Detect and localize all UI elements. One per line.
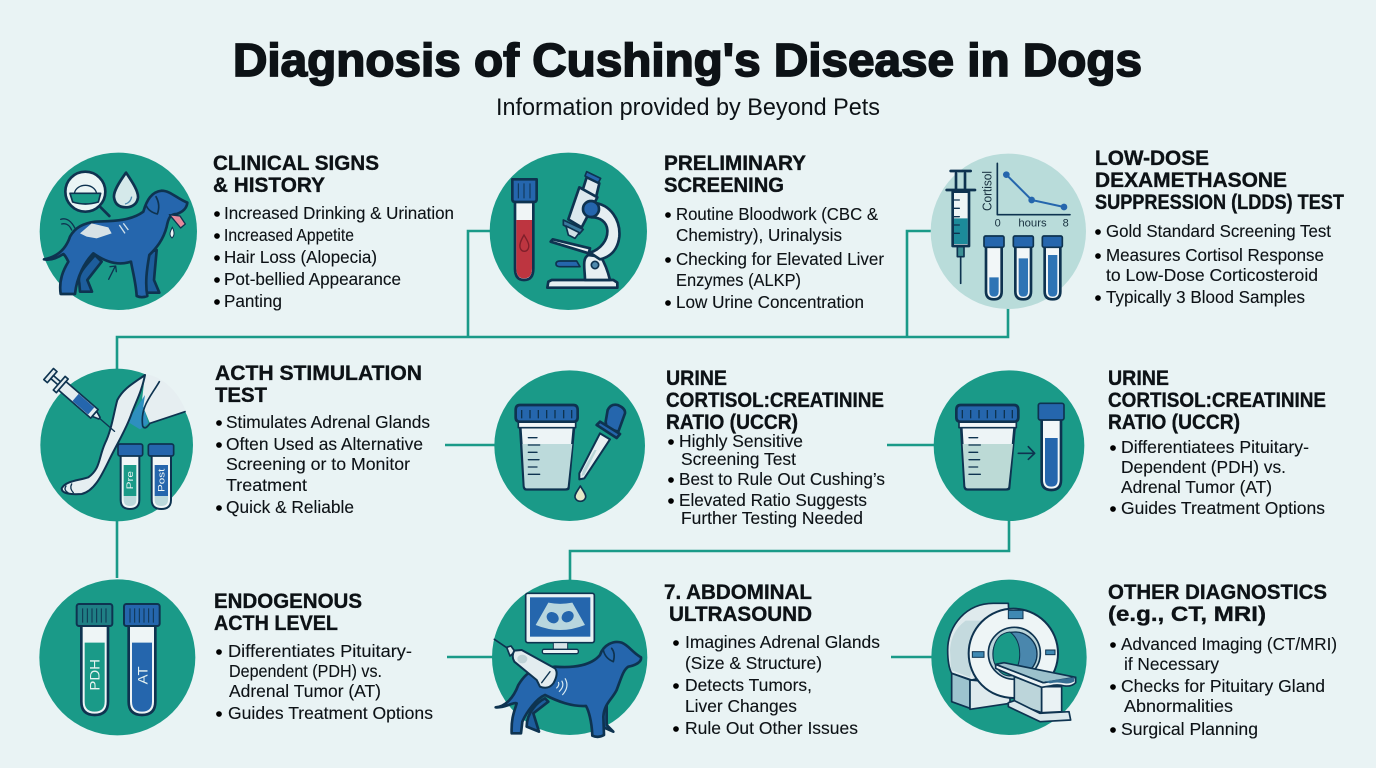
icon: injection into leg with pre and post tubes — [40, 367, 193, 521]
bullet list: Imagines Adrenal Glands — [685, 632, 880, 652]
heading: LOW-DOSE — [1095, 147, 1209, 170]
bullet list: Often Used as Alternative — [226, 434, 423, 454]
bullet list: Hair Loss (Alopecia) — [224, 247, 377, 267]
bullet list: Quick & Reliable — [226, 497, 354, 517]
bullet list — [214, 203, 454, 311]
heading — [664, 152, 806, 197]
bullet list — [665, 204, 884, 312]
icon: blood tube and microscope — [490, 153, 647, 310]
heading: PRELIMINARY — [664, 152, 806, 175]
icon: urine cup and dropper — [494, 370, 645, 521]
icon: syringe, cortisol chart and blood samples: hours — [1018, 218, 1047, 230]
heading: ENDOGENOUS — [214, 590, 362, 613]
panel: urine cortisol creatinine ratio, screening — [494, 367, 885, 528]
panel: urine cortisol creatinine ratio, differentiation — [934, 367, 1326, 521]
icon: syringe, cortisol chart and blood samples: Cortisol — [980, 171, 994, 211]
bullet list: Adrenal Tumor (AT) — [1121, 477, 1272, 497]
subtitle: Information provided by Beyond Pets — [496, 94, 880, 121]
icon: injection into leg with pre and post tubes: Post — [157, 468, 167, 492]
icon: MRI scanner — [931, 580, 1087, 735]
heading: & HISTORY — [213, 174, 325, 197]
bullet list: Guides Treatment Options — [1121, 498, 1325, 518]
heading: URINE — [1108, 367, 1169, 390]
bullet list: Dependent (PDH) vs. — [229, 661, 382, 681]
bullet list: Routine Bloodwork (CBC & — [676, 204, 878, 224]
bullet list — [216, 412, 430, 517]
icon: urine cup, arrow and sample tube — [934, 370, 1084, 521]
panel: other diagnostics — [931, 580, 1337, 739]
heading: (e.g., CT, MRI) — [1108, 603, 1266, 626]
heading: RATIO (UCCR) — [666, 411, 798, 434]
panel: low-dose dexamethasone suppression test — [931, 147, 1344, 309]
heading: ACTH STIMULATION — [215, 362, 422, 385]
bullet list: Measures Cortisol Response — [1106, 245, 1324, 265]
bullet list: Enzymes (ALKP) — [676, 270, 801, 290]
bullet list — [668, 431, 885, 528]
icon: ultrasound monitor, probe and dog — [492, 580, 647, 737]
bullet list: (Size & Structure) — [685, 653, 822, 673]
bullet list: Stimulates Adrenal Glands — [226, 412, 430, 432]
bullet list: Checks for Pituitary Gland — [1121, 676, 1325, 696]
bullet list — [673, 632, 880, 738]
heading — [666, 367, 884, 434]
bullet list: Low Urine Concentration — [676, 292, 864, 312]
icon: PDH and AT tubes — [39, 579, 195, 735]
heading: CLINICAL SIGNS — [213, 152, 379, 175]
bullet list: Panting — [224, 291, 282, 311]
heading: CORTISOL:CREATININE — [666, 389, 884, 412]
title: Diagnosis of Cushing's Disease in Dogs — [233, 34, 1142, 86]
icon: syringe, cortisol chart and blood samples: 0 — [995, 218, 1001, 230]
bullet list: if Necessary — [1124, 654, 1219, 674]
heading: CORTISOL:CREATININE — [1108, 389, 1326, 412]
bullet list: Advanced Imaging (CT/MRI) — [1121, 634, 1337, 654]
bullet list: Increased Drinking & Urination — [224, 203, 454, 223]
icon: syringe, cortisol chart and blood samples: 8 — [1063, 218, 1069, 230]
bullet list: Rule Out Other Issues — [685, 718, 858, 738]
bullet list: Surgical Planning — [1121, 719, 1258, 739]
bullet list: Screening or to Monitor — [226, 454, 410, 474]
heading — [215, 362, 422, 407]
bullet list: Adrenal Tumor (AT) — [229, 681, 381, 701]
panel: endogenous acth level — [39, 579, 433, 735]
bullet list: Liver Changes — [685, 696, 797, 716]
icon: PDH and AT tubes: AT — [134, 666, 150, 684]
heading: URINE — [666, 367, 727, 390]
bullet list: to Low-Dose Corticosteroid — [1106, 265, 1318, 285]
bullet list: Best to Rule Out Cushing’s — [679, 469, 885, 489]
bullet list — [216, 641, 433, 723]
bullet list — [1110, 634, 1337, 739]
bullet list — [1110, 437, 1325, 518]
bullet list: Detects Tumors, — [685, 675, 812, 695]
heading: SUPPRESSION (LDDS) TEST — [1095, 191, 1344, 214]
icon: PDH and AT tubes: PDH — [87, 659, 103, 691]
bullet list: Checking for Elevated Liver — [676, 249, 884, 269]
bullet list: Differentiates Pituitary- — [228, 641, 412, 661]
bullet list: Elevated Ratio Suggests — [679, 490, 867, 510]
bullet list: Treatment — [226, 475, 307, 495]
panel: clinical signs and history — [40, 152, 454, 311]
bullet list: Abnormalities — [1124, 696, 1233, 716]
bullet list: Differentiatees Pituitary- — [1121, 437, 1309, 457]
bullet list: Screening Test — [681, 449, 796, 469]
heading — [1108, 367, 1326, 434]
bullet list — [1095, 221, 1331, 307]
heading: DEXAMETHASONE — [1095, 169, 1287, 192]
bullet list: Gold Standard Screening Test — [1106, 221, 1331, 241]
heading — [1108, 581, 1327, 626]
heading: 7. ABDOMINAL — [664, 581, 812, 604]
heading: OTHER DIAGNOSTICS — [1108, 581, 1327, 604]
heading: RATIO (UCCR) — [1108, 411, 1240, 434]
panel: abdominal ultrasound — [492, 580, 880, 738]
panel: preliminary screening — [490, 152, 884, 312]
bullet list: Chemistry), Urinalysis — [676, 225, 842, 245]
bullet list: Dependent (PDH) vs. — [1121, 457, 1286, 477]
bullet list: Guides Treatment Options — [228, 703, 433, 723]
heading — [214, 590, 362, 635]
heading: ACTH LEVEL — [214, 612, 338, 635]
heading: ULTRASOUND — [669, 603, 812, 626]
heading: SCREENING — [664, 174, 784, 197]
bullet list: Further Testing Needed — [681, 508, 863, 528]
bullet list: Increased Appetite — [224, 225, 354, 245]
heading — [664, 581, 812, 626]
icon: syringe, cortisol chart and blood samples — [931, 154, 1086, 309]
heading — [213, 152, 379, 197]
panel: acth stimulation test — [40, 362, 430, 521]
icon: injection into leg with pre and post tubes: Pre — [125, 471, 135, 489]
bullet list: Highly Sensitive — [679, 431, 803, 451]
bullet list: Typically 3 Blood Samples — [1106, 287, 1305, 307]
connector lines — [117, 231, 1009, 657]
heading: TEST — [215, 384, 267, 407]
bullet list: Pot-bellied Appearance — [224, 269, 401, 289]
icon: dog with food bowl and water drop — [40, 153, 197, 310]
heading — [1095, 147, 1344, 214]
